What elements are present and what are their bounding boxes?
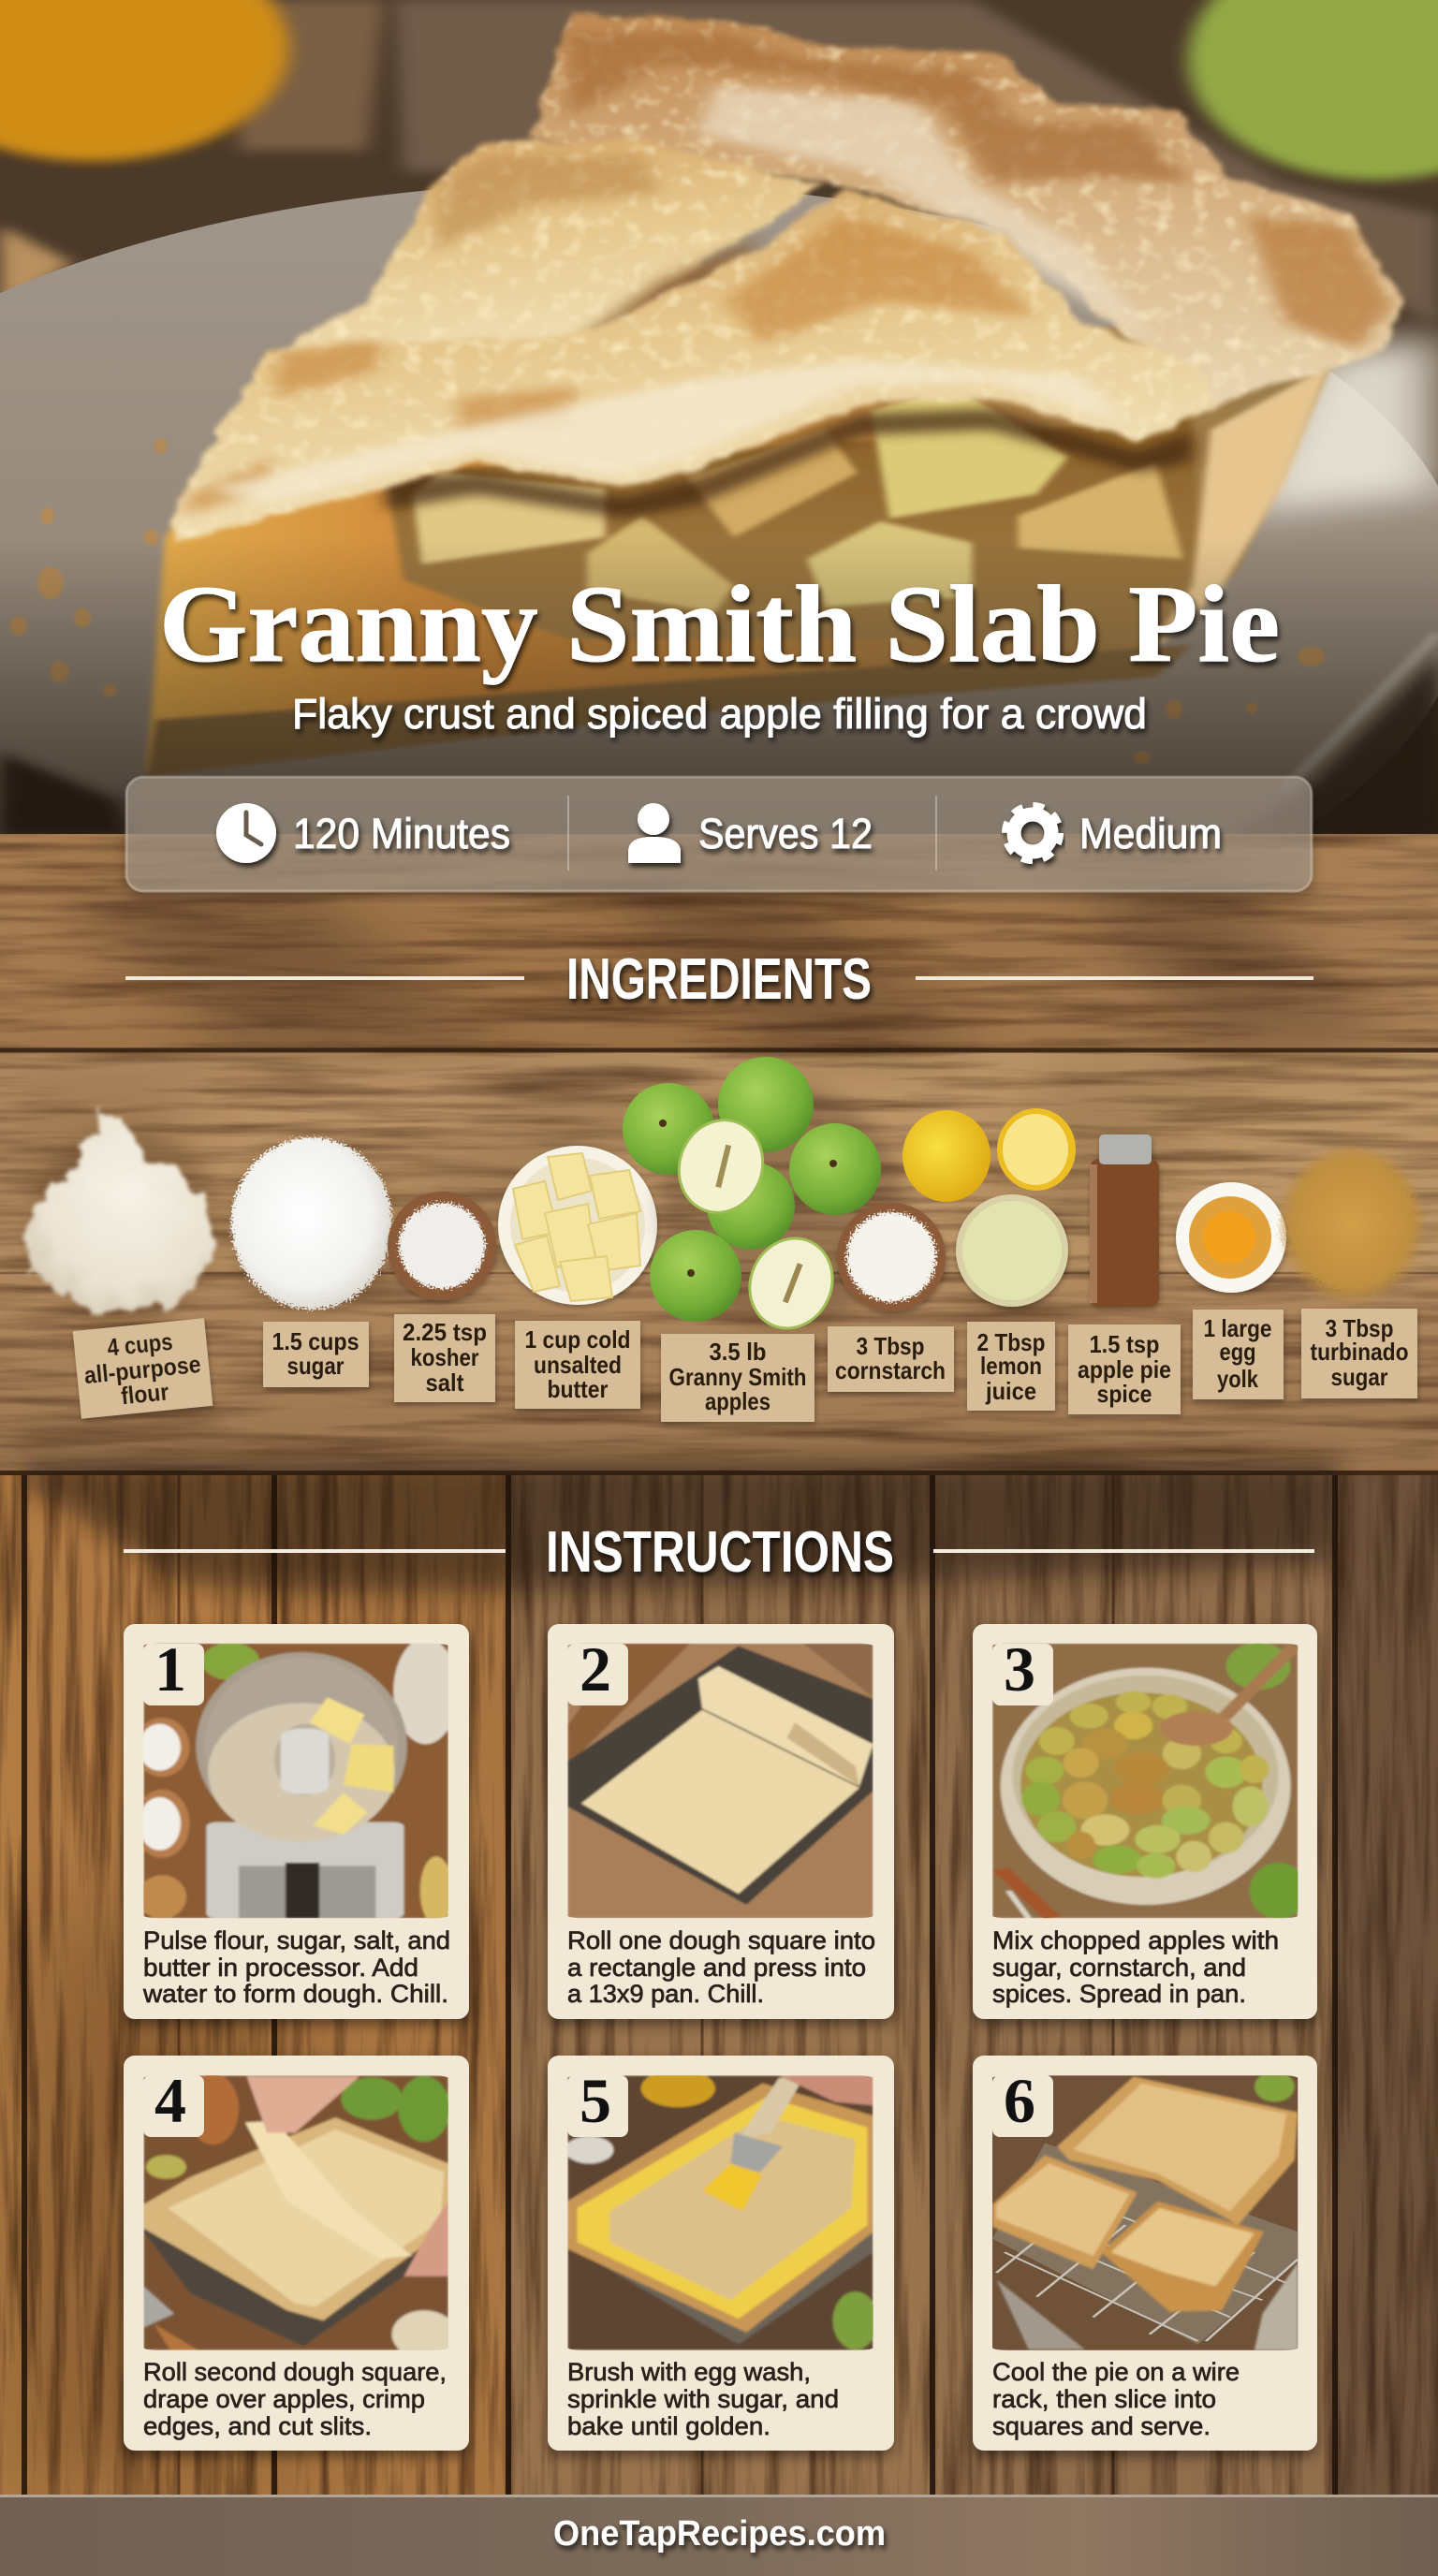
step 3 card xyxy=(973,1624,1317,2019)
shadow under lip xyxy=(385,408,1192,519)
label: butter: butter xyxy=(547,1375,609,1403)
step 3 number: 3 xyxy=(1004,1633,1035,1705)
stat: medium: Medium xyxy=(1079,810,1222,857)
wood background: instruction planks xyxy=(0,1460,1438,2496)
step 2 image: dough in pan xyxy=(567,1644,873,1918)
step 1 text: water to form dough. Chill. xyxy=(142,1980,448,2008)
label: cornstarch: cornstarch xyxy=(835,1356,946,1384)
label: turbinado sugar: sugar xyxy=(1331,1363,1387,1391)
step 3 text: sugar, cornstarch, and xyxy=(992,1954,1246,1982)
step 4 text: edges, and cut slits. xyxy=(143,2412,372,2440)
step 3 text: spices. Spread in pan. xyxy=(992,1980,1246,2008)
label: turbinado sugar xyxy=(1301,1309,1417,1398)
step 2 text: Roll one dough square into xyxy=(567,1926,875,1954)
pie body and filling xyxy=(147,322,1329,774)
ingredient: flour pile xyxy=(24,1112,221,1315)
label: flour xyxy=(73,1318,213,1419)
step 2 text: a rectangle and press into xyxy=(567,1954,866,1982)
label: spice xyxy=(1068,1325,1181,1414)
ingredient: lemon juice xyxy=(956,1194,1068,1307)
step 5 image: egg wash brushing xyxy=(565,2070,878,2350)
instructions heading: INSTRUCTIONS xyxy=(546,1520,894,1585)
step 2 number: 2 xyxy=(580,1633,611,1705)
step 6 text: rack, then slice into xyxy=(992,2385,1216,2413)
label: egg yolk xyxy=(1193,1310,1284,1399)
ingredient: apple pie spice jar xyxy=(1090,1134,1159,1307)
label: flour: flour xyxy=(120,1377,170,1410)
step 5 text: sprinkle with sugar, and xyxy=(567,2385,839,2413)
label: salt: kosher xyxy=(410,1343,479,1371)
step 2 text xyxy=(567,1926,875,2008)
label: butter xyxy=(515,1321,640,1409)
ingredient: egg yolk bowl xyxy=(1176,1182,1286,1293)
label: spice: spice xyxy=(1097,1380,1152,1408)
step 4 card xyxy=(124,2056,469,2451)
apple chunks xyxy=(413,387,1183,612)
label: salt xyxy=(394,1314,495,1402)
ingredient: sugar pile xyxy=(227,1137,396,1312)
step 2 number xyxy=(567,1633,628,1705)
lemon (blurred) xyxy=(0,0,289,161)
apple half xyxy=(667,1108,775,1224)
step 6 image: pie on wire rack xyxy=(992,2071,1298,2350)
footer website text: OneTapRecipes.com xyxy=(553,2514,886,2554)
step 4 text: drape over apples, crimp xyxy=(143,2385,425,2413)
step 4 text xyxy=(143,2358,447,2440)
label: apples: 3.5 lb xyxy=(710,1338,766,1366)
step 3 image: apples in bowl xyxy=(992,1643,1308,1919)
step 1 card xyxy=(124,1624,469,2019)
step 3 number xyxy=(992,1633,1053,1705)
stat: serves 12: Serves 12 xyxy=(698,810,873,857)
hero photo: pie slice on plate xyxy=(0,0,1438,856)
step 1 number: 1 xyxy=(154,1633,186,1705)
front crust xyxy=(174,188,1211,543)
label: spice: apple pie xyxy=(1078,1355,1171,1383)
label: cornstarch: 3 Tbsp xyxy=(856,1332,925,1360)
label: sugar: sugar xyxy=(286,1352,345,1380)
step 4 image: draping top crust xyxy=(143,2073,456,2358)
step 3 text: Mix chopped apples with xyxy=(992,1926,1279,1954)
icon: person xyxy=(628,803,681,863)
step 5 text: Brush with egg wash, xyxy=(567,2358,811,2386)
step 4 number xyxy=(143,2065,204,2137)
step 6 text: Cool the pie on a wire xyxy=(992,2358,1240,2386)
step 2 text: a 13x9 pan. Chill. xyxy=(567,1980,764,2008)
bottom darkening xyxy=(0,537,1438,838)
label: flour: 4 cups xyxy=(106,1327,174,1362)
label: lemon juice xyxy=(967,1322,1055,1411)
label: spice: 1.5 tsp xyxy=(1090,1330,1159,1358)
back crimped crust xyxy=(532,13,1403,408)
step 6 number: 6 xyxy=(1004,2065,1035,2136)
title: Granny Smith Slab Pie xyxy=(159,563,1280,685)
icon: gear xyxy=(1005,806,1060,860)
step 1 number xyxy=(143,1633,204,1705)
stat: 120 minutes: 120 Minutes xyxy=(293,810,510,857)
label: lemon juice: juice xyxy=(985,1377,1036,1405)
plate xyxy=(0,190,1438,834)
ingredient: butter bowl xyxy=(498,1146,657,1305)
step 3 text xyxy=(992,1926,1279,2008)
subtitle: Flaky crust and spiced apple filling for a crowd xyxy=(292,690,1147,738)
label: apples: Granny Smith xyxy=(668,1363,807,1391)
label: egg yolk: 1 large xyxy=(1204,1314,1271,1342)
ingredient: cornstarch bowl xyxy=(837,1203,946,1311)
step 6 text: squares and serve. xyxy=(992,2412,1211,2440)
step 2 card xyxy=(548,1624,894,2019)
ingredient: salt bowl xyxy=(388,1192,496,1300)
step 6 card xyxy=(973,2056,1317,2451)
step 4 number: 4 xyxy=(154,2065,186,2136)
stats bar xyxy=(126,777,1312,891)
label: lemon juice: 2 Tbsp xyxy=(977,1328,1045,1356)
mid crust xyxy=(290,136,826,351)
label: egg yolk: yolk xyxy=(1217,1365,1258,1393)
green apple (blurred) xyxy=(1188,0,1438,180)
ingredient: Granny Smith apples xyxy=(623,1057,903,1342)
label: apples xyxy=(661,1334,814,1422)
label: turbinado sugar: turbinado xyxy=(1311,1338,1408,1366)
label: butter: 1 cup cold xyxy=(524,1325,631,1354)
label: salt: 2.25 tsp xyxy=(403,1318,487,1346)
crumbs xyxy=(10,438,1326,764)
step 5 number xyxy=(567,2065,628,2137)
icon: clock xyxy=(216,803,276,863)
wood background: ingredient boards xyxy=(0,833,1438,1475)
label: apples: apples xyxy=(705,1387,770,1415)
label: butter: unsalted xyxy=(534,1351,622,1379)
ingredient labels xyxy=(73,1309,1417,1422)
step 6 number xyxy=(992,2065,1053,2137)
label: sugar xyxy=(263,1322,369,1387)
label: lemon juice: lemon xyxy=(980,1352,1042,1380)
label: sugar: 1.5 cups xyxy=(271,1327,360,1355)
step 1 text: Pulse flour, sugar, salt, and xyxy=(143,1926,450,1954)
label: cornstarch xyxy=(828,1326,954,1392)
step 5 number: 5 xyxy=(580,2065,611,2136)
apple half lower xyxy=(735,1224,847,1342)
label: egg yolk: egg xyxy=(1219,1338,1256,1366)
step 1 text xyxy=(142,1926,450,2008)
step 6 text xyxy=(992,2358,1240,2440)
step 1 image: food processor xyxy=(135,1638,458,1925)
step 1 text: butter in processor. Add xyxy=(143,1954,418,1982)
ingredient: lemon half xyxy=(997,1108,1076,1191)
label: salt: salt xyxy=(425,1368,464,1397)
ingredient: turbinado sugar xyxy=(1279,1147,1425,1306)
label: flour: all-purpose xyxy=(82,1350,202,1389)
label: turbinado sugar: 3 Tbsp xyxy=(1326,1314,1393,1342)
step 5 text xyxy=(567,2358,839,2440)
ingredient: whole lemon xyxy=(902,1110,990,1202)
step 5 card xyxy=(548,2056,894,2451)
footer bar xyxy=(0,2495,1438,2576)
step 4 text: Roll second dough square, xyxy=(143,2358,447,2386)
step 5 text: bake until golden. xyxy=(567,2412,770,2440)
ingredients heading: INGREDIENTS xyxy=(566,947,872,1012)
